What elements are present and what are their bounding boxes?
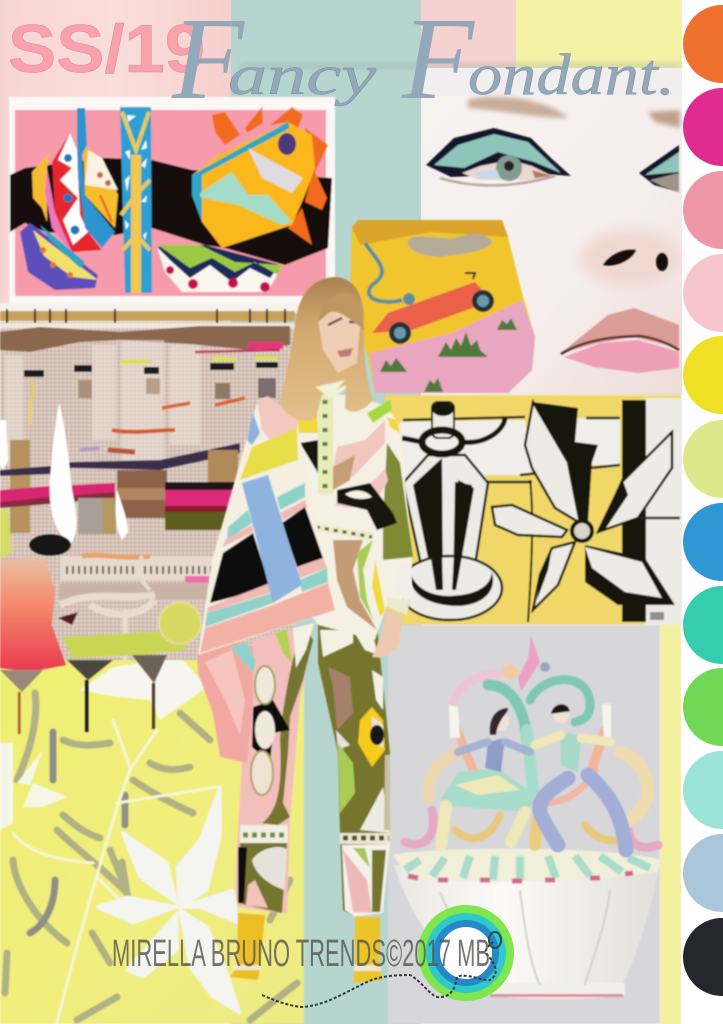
pale column ridges <box>5 340 200 465</box>
lime edge at far left <box>0 508 12 558</box>
panel: woven wall hanging <box>0 303 300 734</box>
left bloom <box>0 743 67 830</box>
printed cape <box>198 396 335 655</box>
lime woven strip and disc <box>63 602 201 658</box>
stems <box>13 720 217 1023</box>
panel: painted yellow bag with red car <box>350 220 535 393</box>
flame finial <box>518 635 540 692</box>
panel: beauty close-up with graphic eye make-up <box>421 68 682 395</box>
right eye make-up <box>639 145 679 192</box>
ribbed top disc <box>393 849 660 882</box>
left vase shape <box>32 108 118 252</box>
panel: abstract fish collage <box>9 97 335 310</box>
black wool blob <box>29 534 71 556</box>
title: Fondant.: ondant. <box>468 42 675 107</box>
logo rings with bee trail <box>262 905 514 1007</box>
lady dancer <box>441 708 535 845</box>
panel: black and white Leger still life <box>385 395 682 625</box>
base bowl <box>394 865 660 999</box>
multicolour dark stripe <box>0 443 240 476</box>
flower <box>492 402 675 610</box>
bamboo rod <box>0 309 295 328</box>
grass tufts <box>380 318 517 392</box>
tassel fans <box>0 655 167 734</box>
pink and orange net <box>0 558 66 672</box>
red car <box>372 273 494 344</box>
title: Fancy <box>171 0 376 124</box>
cape fold <box>197 640 255 763</box>
panel: ceramic dancers figurine <box>388 625 660 1024</box>
title: Fancy: ancy <box>228 45 376 107</box>
yarn accents <box>24 342 283 452</box>
neck <box>333 365 350 387</box>
grey leaves <box>5 693 297 1020</box>
magenta band <box>0 483 115 503</box>
panel: yellow lily painting <box>0 655 304 1024</box>
face <box>318 293 364 373</box>
hand <box>372 607 403 658</box>
male dancer <box>535 706 626 850</box>
lips <box>561 308 679 373</box>
lower loops and ropes <box>58 555 218 660</box>
purple bowl leaf <box>20 223 98 290</box>
season label SS/19: SS/19 <box>8 11 205 87</box>
palette swatches <box>683 5 723 996</box>
collar <box>315 380 345 398</box>
vase <box>398 402 505 620</box>
brown fringe <box>0 326 290 352</box>
lower zigzag bowl <box>157 245 282 292</box>
fish <box>192 107 328 248</box>
trousers right leg <box>318 620 390 917</box>
nose <box>580 230 680 286</box>
white cut-out openings <box>0 403 128 543</box>
brows <box>468 97 680 128</box>
white star lily <box>97 787 240 1013</box>
trousers left leg <box>235 623 314 913</box>
yellow boots <box>230 913 383 983</box>
white vases <box>449 704 611 738</box>
sculpted arches <box>405 675 658 847</box>
signature <box>650 612 664 620</box>
upper pale bloom <box>80 657 207 720</box>
striped block <box>165 482 237 530</box>
smoke trail <box>365 243 402 302</box>
fashion model in printed outfit <box>197 277 413 983</box>
tan block <box>10 440 30 533</box>
shirt torso <box>296 378 413 640</box>
brown block <box>117 470 167 518</box>
hair <box>280 277 373 421</box>
title: Fondant. <box>401 0 675 124</box>
vertical blue stripe <box>120 107 152 293</box>
left eye make-up <box>426 128 571 185</box>
black band <box>10 158 332 265</box>
